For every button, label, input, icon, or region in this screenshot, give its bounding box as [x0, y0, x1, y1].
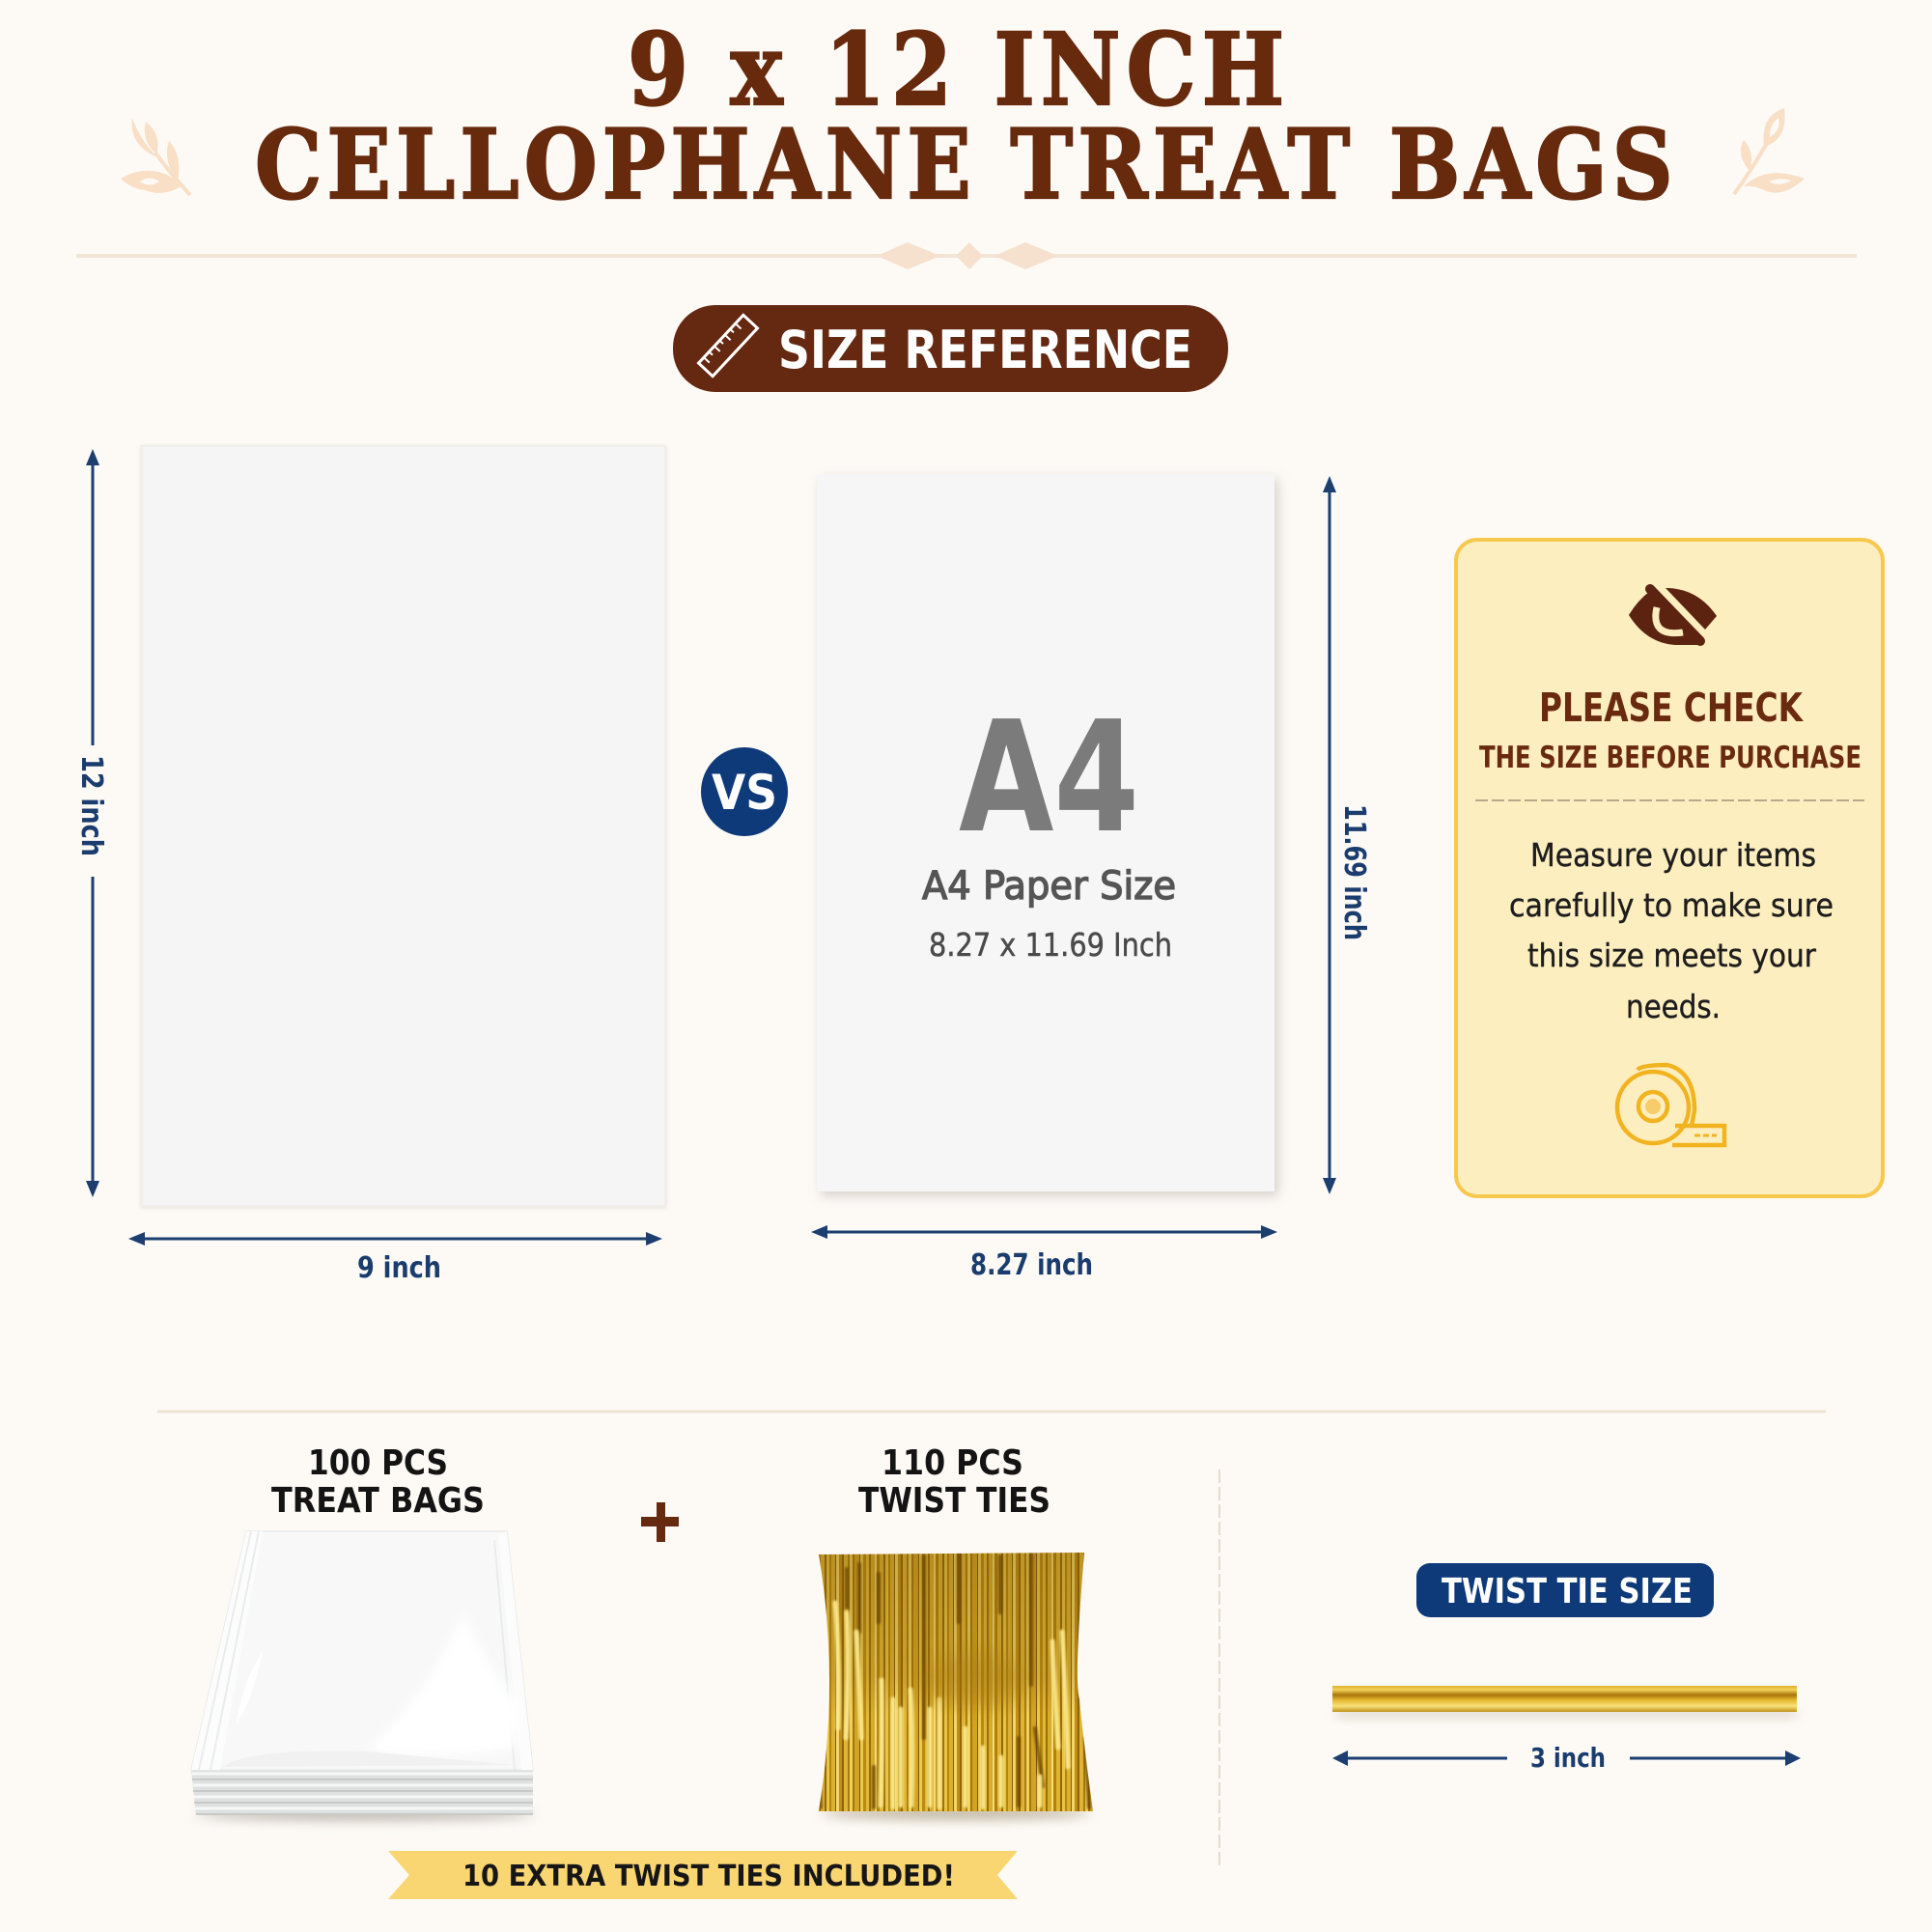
- header divider ornament: [76, 242, 1857, 269]
- image: stack of treat bags: [191, 1531, 535, 1820]
- callout body: [1509, 836, 1834, 1025]
- label: 110 pcs twist ties: TWIST TIES: [858, 1481, 1050, 1521]
- image: bundle of gold twist ties: [811, 1545, 1101, 1820]
- label: 100 pcs treat bags: 100 PCS: [308, 1443, 448, 1483]
- twist tie size pill: TWIST TIE SIZE: [1442, 1572, 1693, 1611]
- callout body: this size meets your: [1527, 937, 1816, 974]
- size reference pill: [673, 305, 1228, 392]
- title: [255, 11, 1673, 220]
- arrow: 9 inch width: [128, 1232, 662, 1285]
- icon: tape measure: [1617, 1065, 1724, 1145]
- banner: 10 extra twist ties: [388, 1851, 1018, 1899]
- arrow: 3 inch: 3 inch: [1530, 1742, 1606, 1774]
- size reference pill: SIZE REFERENCE: [778, 320, 1192, 380]
- arrow: 12 inch height: [74, 449, 108, 1197]
- callout body: Measure your items: [1530, 836, 1816, 874]
- vs badge: VS: [712, 765, 777, 821]
- panel: 9 x 12 inch sheet: [142, 446, 665, 1206]
- twist tie size pill: [1416, 1563, 1714, 1617]
- callout body: needs.: [1626, 988, 1721, 1025]
- A4 dimensions: 8.27 x 11.69 Inch: [929, 926, 1172, 964]
- image: single gold twist tie: [1332, 1686, 1797, 1716]
- icon: right leaf ornament: [1734, 108, 1805, 194]
- panel: A4 sheet: [817, 474, 1274, 1191]
- label: 110 pcs twist ties: 110 PCS: [882, 1443, 1023, 1483]
- vs badge: [701, 747, 788, 836]
- arrow: 12 inch height: 12 inch: [74, 755, 108, 856]
- label: 100 pcs treat bags: [271, 1443, 485, 1521]
- label: 100 pcs treat bags: TREAT BAGS: [271, 1481, 485, 1521]
- title: 9 x 12 INCH: [628, 11, 1284, 127]
- callout body: carefully to make sure: [1509, 886, 1834, 924]
- callout heading: PLEASE CHECK: [1539, 685, 1805, 731]
- icon: ruler: [698, 315, 758, 377]
- arrow: 3 inch: [1332, 1742, 1801, 1774]
- icon: crossed eye: [1629, 588, 1717, 645]
- label: 110 pcs twist ties: [858, 1443, 1050, 1521]
- A4 large label: A4: [959, 688, 1139, 867]
- arrow: 8.27 inch width: [811, 1225, 1277, 1282]
- icon: plus: [641, 1502, 679, 1542]
- banner: 10 extra twist ties: 10 EXTRA TWIST TIES INCLUDED!: [462, 1860, 955, 1893]
- title: CELLOPHANE TREAT BAGS: [255, 108, 1673, 220]
- A4 paper size label: A4 Paper Size: [922, 864, 1176, 909]
- arrow: 11.69 inch height: 11.69 inch: [1337, 804, 1371, 940]
- panel: please check callout: [1456, 540, 1883, 1196]
- arrow: 9 inch width: 9 inch: [357, 1251, 441, 1285]
- arrow: 11.69 inch height: [1323, 476, 1371, 1194]
- arrow: 8.27 inch width: 8.27 inch: [970, 1248, 1093, 1282]
- icon: left leaf ornament: [121, 118, 190, 195]
